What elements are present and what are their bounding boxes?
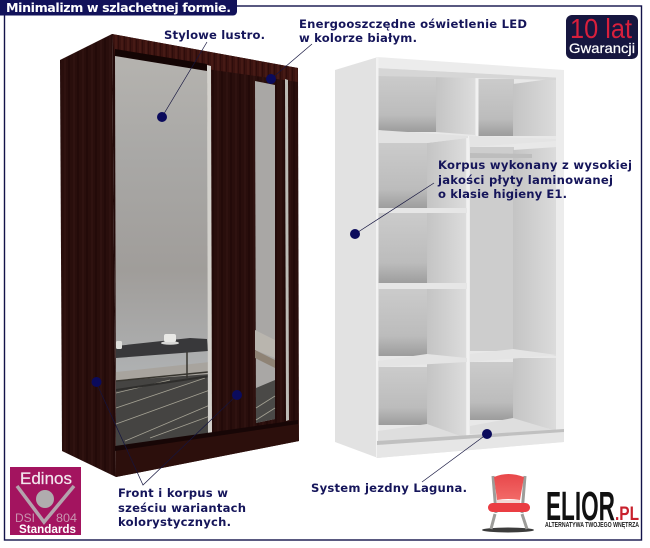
base rail bbox=[377, 431, 564, 458]
rug bbox=[116, 374, 210, 447]
logo: Edinos standards: 804 bbox=[56, 511, 77, 525]
left side panel bbox=[60, 34, 116, 477]
shelves bbox=[378, 130, 468, 143]
callout: system jezdny: System jezdny Laguna. bbox=[311, 481, 467, 495]
hanging rail bbox=[470, 153, 532, 158]
left side bbox=[335, 57, 378, 458]
logo: Edinos standards bbox=[10, 467, 81, 536]
lower-left compartment 3 bbox=[378, 289, 466, 359]
top-left compartment bbox=[378, 71, 475, 135]
callout: front i korpus: sześciu wariantach bbox=[118, 501, 246, 515]
callout: lustro: Stylowe lustro. bbox=[164, 28, 265, 42]
logo: Edinos standards: Standards bbox=[19, 522, 76, 536]
top-right compartment bbox=[478, 78, 557, 136]
logo: red chair bbox=[482, 474, 534, 532]
logo: Edinos standards: DSI bbox=[15, 511, 35, 525]
right mirror bbox=[255, 81, 275, 423]
callout dots bbox=[92, 74, 492, 439]
lower-right bottom compartment bbox=[470, 358, 557, 431]
badge: 10 lat gwarancji bbox=[566, 13, 638, 59]
right edge bbox=[556, 76, 564, 442]
title banner: Minimalizm w szlachetnej formie. bbox=[6, 0, 231, 15]
lower-left compartment 1 bbox=[378, 138, 466, 209]
badge: 10 lat gwarancji: 10 lat bbox=[570, 13, 632, 44]
lower-left compartment 2 bbox=[378, 213, 466, 284]
table top bbox=[116, 338, 208, 358]
callout: LED: Energooszczędne oświetlenie LED bbox=[299, 17, 527, 31]
silver strip left bbox=[207, 65, 212, 435]
mirror floor bbox=[116, 362, 210, 383]
interior background bbox=[377, 68, 564, 458]
logo: Elior.pl: .PL bbox=[615, 504, 639, 525]
callout: korpus: Korpus wykonany z wysokiej bbox=[438, 158, 632, 172]
callout: front i korpus: Front i korpus w bbox=[118, 486, 228, 500]
cups bbox=[161, 341, 179, 345]
callout: LED: w kolorze białym. bbox=[299, 31, 417, 45]
callout: front i korpus bbox=[118, 486, 246, 529]
callout: korpus: jakości płyty laminowanej bbox=[437, 173, 613, 187]
dividers bbox=[476, 73, 478, 136]
badge: 10 lat gwarancji: Gwarancji bbox=[569, 40, 635, 56]
lower-right tall compartment bbox=[470, 147, 557, 356]
callout: korpus: o klasie higieny E1. bbox=[438, 187, 567, 201]
left front edge bbox=[376, 57, 378, 458]
callout leader lines bbox=[96, 42, 487, 485]
callout: front i korpus: kolorystycznych. bbox=[118, 515, 231, 529]
top board bbox=[377, 57, 564, 78]
logo: Edinos standards: Edinos bbox=[20, 470, 72, 488]
bottom plinth bbox=[116, 423, 299, 477]
callout: korpus bbox=[437, 158, 632, 201]
white wardrobe open interior bbox=[335, 57, 564, 458]
top cornice bbox=[112, 34, 298, 82]
silver strip right bbox=[285, 79, 289, 421]
front panel bbox=[112, 34, 299, 477]
dark wardrobe with mirrored doors bbox=[60, 34, 299, 477]
lower-left compartment 4 bbox=[378, 362, 466, 438]
callout: LED bbox=[299, 17, 527, 45]
left mirror bbox=[115, 56, 210, 447]
